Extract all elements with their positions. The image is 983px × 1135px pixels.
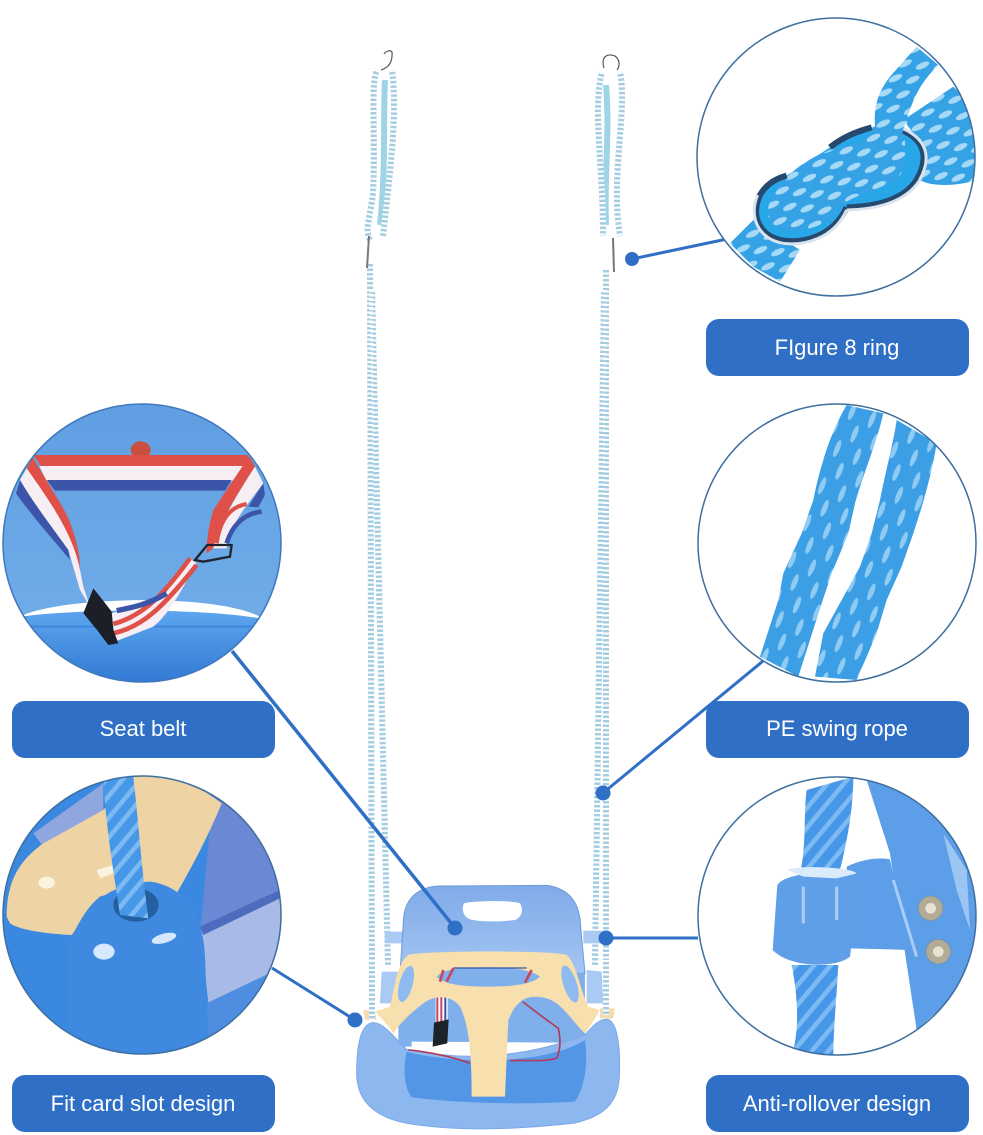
label: Fit card slot design: [12, 1075, 275, 1132]
label: Fit card slot design: Fit card slot design: [51, 1091, 235, 1116]
left strap: [16, 457, 90, 607]
suspension ropes: [367, 51, 622, 1015]
right strap: [207, 456, 265, 553]
connector line: figure 8 ring: [625, 239, 727, 266]
panel: seat belt detail: [3, 404, 281, 687]
label: Seat belt: Seat belt: [100, 716, 186, 741]
panel: figure 8 ring detail: [697, 18, 977, 296]
connector line: card slot: [272, 968, 362, 1028]
label: PE swing rope: [706, 701, 969, 758]
panel: swing photo: [357, 51, 622, 1129]
connector line: seat belt: [232, 651, 462, 936]
panel: PE swing rope detail: [698, 404, 976, 682]
panel: anti-rollover detail: [698, 777, 983, 1057]
label: Figure 8 ring: FIgure 8 ring: [775, 335, 899, 360]
label: Anti-rollover design: [706, 1075, 969, 1132]
seat: [357, 885, 620, 1129]
panel: fit card slot detail: [3, 775, 290, 1063]
label: Seat belt: [12, 701, 275, 758]
label: Figure 8 ring: [706, 319, 969, 376]
connector line: PE swing rope: [596, 661, 763, 800]
lower strap: [112, 545, 232, 642]
label: Anti-rollover design: Anti-rollover design: [743, 1091, 931, 1116]
connector line: anti-rollover: [598, 930, 698, 946]
label: PE swing rope: PE swing rope: [766, 716, 908, 741]
rope ends at seat: [372, 960, 606, 1020]
